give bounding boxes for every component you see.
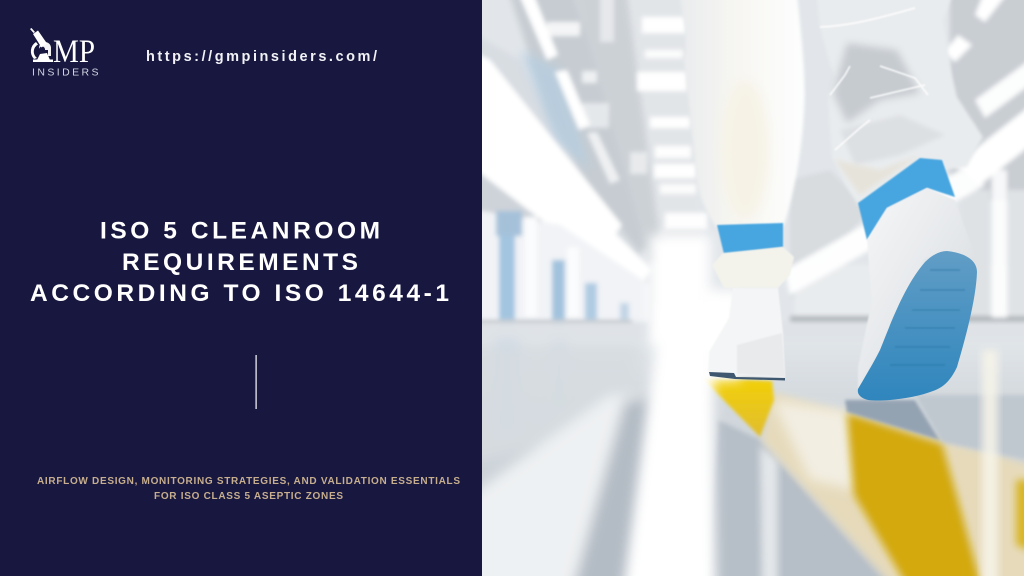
ceiling beams: [482, 0, 659, 254]
logo: GMP Insiders: [30, 28, 98, 78]
ankle band: [717, 223, 783, 254]
floor: yellow stripe: [702, 350, 1024, 576]
left wall panels: [482, 209, 648, 325]
right ceiling strips: [785, 0, 1024, 318]
floor: [450, 322, 1024, 576]
saturated yellow: [847, 413, 985, 576]
vertical reflection: [982, 350, 998, 576]
upper yellow patch: [702, 378, 774, 437]
heel gather: [838, 160, 910, 194]
right corridor: [790, 0, 1024, 324]
website url: https://gmpinsiders.com/: [146, 49, 377, 65]
grey floor panel: [715, 420, 875, 576]
left leg: [680, 0, 805, 380]
title: ACCORDING TO ISO 14644-1: [30, 280, 449, 307]
boot sole: [709, 372, 785, 380]
soft horizon: [482, 318, 1024, 334]
logo subtitle: INSIDERS: [32, 66, 98, 78]
shoe shadow: [845, 400, 940, 440]
sole tread: [890, 270, 965, 365]
subtitle: [37, 476, 460, 502]
logo wordmark: MP: [53, 34, 95, 70]
ceiling light panels: [547, 0, 707, 229]
central glow: [622, 235, 740, 576]
trouser grey shading: [833, 43, 920, 123]
pale band: [762, 392, 1024, 576]
ceiling blue tint: [520, 52, 583, 160]
floor reflections: [482, 339, 650, 576]
right leg: [817, 0, 983, 401]
trouser warm shading: [725, 84, 770, 216]
photo: cleanroom corridor with walking legs: [450, 0, 1024, 576]
shoe sole: [858, 251, 977, 401]
title: REQUIREMENTS: [122, 249, 358, 276]
title: [30, 218, 449, 307]
background: navy panel: [0, 0, 482, 576]
long light strips left: [482, 0, 650, 280]
subtitle: FOR ISO CLASS 5 ASEPTIC ZONES: [154, 491, 343, 502]
trouser cuff: [712, 247, 794, 288]
vertical divider: [256, 355, 257, 409]
right floor: [915, 395, 1024, 462]
ankle band: [858, 158, 955, 240]
title: ISO 5 CLEANROOM: [100, 218, 380, 244]
shoe upper: [858, 187, 955, 388]
corridor ceiling and walls: [450, 0, 1024, 340]
boot: [708, 288, 785, 378]
subtitle: AIRFLOW DESIGN, MONITORING STRATEGIES, AND VALIDATION ESSENTIALS: [37, 476, 460, 487]
icon: microscope: [30, 28, 53, 62]
trouser folds: [820, 8, 928, 150]
